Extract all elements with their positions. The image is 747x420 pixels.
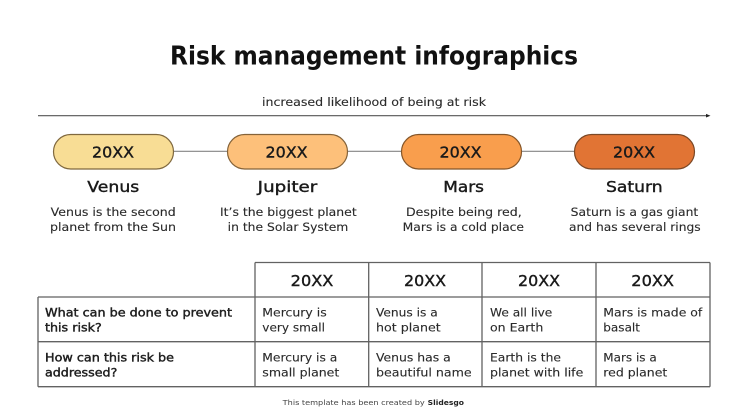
footer credit: Slidesgo [428, 399, 464, 407]
title: Risk management infographics [170, 42, 578, 72]
column: Jupiter: Jupiter [257, 178, 318, 196]
row: prevention: Mercury is [262, 306, 327, 320]
row: prevention: basalt [603, 320, 641, 334]
row: addressing: Earth is the [490, 350, 561, 364]
row: addressing: How can this risk be [45, 350, 174, 364]
column: Saturn: Saturn [606, 178, 663, 196]
column: Venus: Venus [87, 178, 139, 196]
table header years: 20XX [518, 272, 560, 290]
row: prevention: this risk? [45, 320, 102, 334]
column: Saturn: 20XX [613, 144, 655, 162]
row: addressing: red planet [603, 366, 668, 380]
column: Venus: planet from the Sun [50, 220, 176, 234]
row: addressing: beautiful name [376, 366, 472, 380]
column: Mars: Mars [443, 178, 484, 196]
table header years [291, 272, 674, 290]
row: prevention [45, 306, 703, 334]
row: prevention: What can be done to prevent [45, 306, 233, 320]
row: prevention: Venus is a [376, 306, 438, 320]
row: addressing [45, 350, 668, 380]
column: Jupiter: in the Solar System [228, 220, 348, 234]
column: Venus: 20XX [92, 144, 134, 162]
axis label: increased likelihood of being at risk [262, 95, 486, 109]
footer credit [282, 399, 464, 407]
column: Jupiter: 20XX [266, 144, 308, 162]
column: Mars: 20XX [440, 144, 482, 162]
row: addressing: Mercury is a [262, 350, 337, 364]
row: prevention: We all live [490, 306, 552, 320]
row: addressing: planet with life [490, 366, 583, 380]
row: addressing: Mars is a [603, 350, 657, 364]
row: addressing: small planet [262, 366, 340, 380]
timeline connector [173, 150, 574, 152]
table header years: 20XX [631, 272, 674, 290]
column: Mars: Mars is a cold place [403, 220, 524, 234]
row: addressing: Venus has a [376, 350, 451, 364]
table header years: 20XX [291, 272, 334, 290]
row: prevention: Mars is made of [603, 306, 703, 320]
column: Venus: Venus is the second [51, 205, 176, 219]
column: Jupiter [220, 134, 357, 234]
row: prevention: hot planet [376, 320, 441, 334]
column: Saturn: Saturn is a gas giant [571, 205, 699, 219]
column: Venus [50, 134, 176, 234]
row: prevention: on Earth [490, 320, 543, 334]
row: prevention: very small [262, 320, 325, 334]
column: Jupiter: It’s the biggest planet [220, 205, 357, 219]
footer credit: This template has been created by [282, 399, 425, 407]
row: addressing: addressed? [45, 366, 117, 380]
risk table [38, 262, 710, 387]
arrow: increasing likelihood [38, 114, 710, 118]
column: Mars: Despite being red, [406, 205, 522, 219]
column: Mars [402, 134, 524, 234]
table header years: 20XX [404, 272, 446, 290]
column: Saturn [569, 134, 701, 234]
column: Saturn: and has several rings [569, 220, 701, 234]
